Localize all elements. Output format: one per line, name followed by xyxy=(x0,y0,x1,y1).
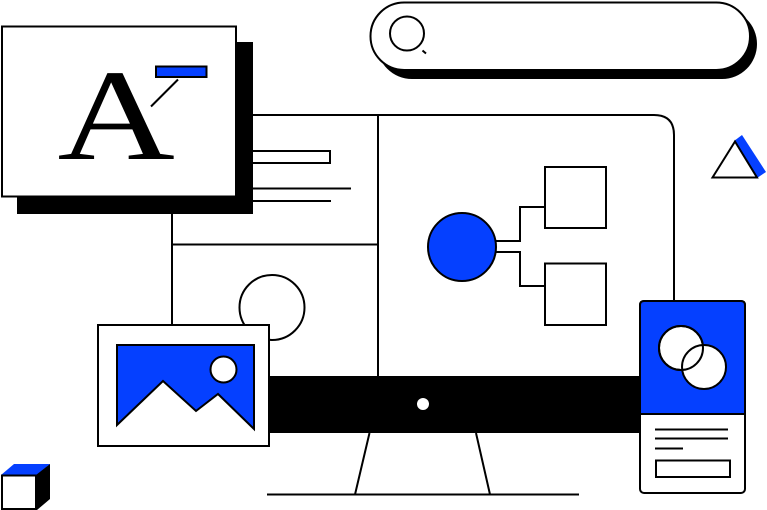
phone body xyxy=(640,301,745,493)
lower box xyxy=(545,264,606,325)
upper box xyxy=(545,167,606,228)
flow diagram xyxy=(428,167,606,325)
cube top xyxy=(1,464,50,475)
phone text lines xyxy=(655,430,728,448)
triangle outline xyxy=(712,142,757,178)
image card xyxy=(98,325,269,446)
sun xyxy=(210,356,236,382)
cube icon xyxy=(1,464,50,510)
monitor bezel xyxy=(262,376,647,433)
phone button xyxy=(656,460,730,477)
monitor xyxy=(172,115,674,494)
typography card xyxy=(2,26,253,214)
icon: magnifier xyxy=(390,16,426,54)
phone card xyxy=(640,301,745,493)
sidebar text lines xyxy=(253,151,351,201)
power dot xyxy=(417,398,429,410)
letter A: A xyxy=(58,43,175,187)
search bar xyxy=(370,2,757,79)
sidebar circle xyxy=(240,275,304,340)
card shadow xyxy=(17,42,253,214)
image frame xyxy=(98,325,269,446)
monitor stand xyxy=(267,433,579,494)
monitor outline xyxy=(172,115,674,325)
search bar field xyxy=(370,2,750,70)
cube side xyxy=(36,464,50,510)
overlapping circles xyxy=(659,326,726,389)
monitor panel dividers xyxy=(172,115,378,376)
flow connectors xyxy=(496,207,545,286)
pointer line xyxy=(151,80,178,106)
blue node xyxy=(428,213,496,281)
triangle icon xyxy=(712,135,766,178)
mountain picture xyxy=(117,345,254,429)
cube front xyxy=(2,476,36,509)
phone blue header xyxy=(640,301,745,414)
blue handle xyxy=(156,66,206,77)
triangle blue edge xyxy=(734,135,766,178)
card face xyxy=(2,26,236,196)
search bar shadow xyxy=(377,9,757,79)
